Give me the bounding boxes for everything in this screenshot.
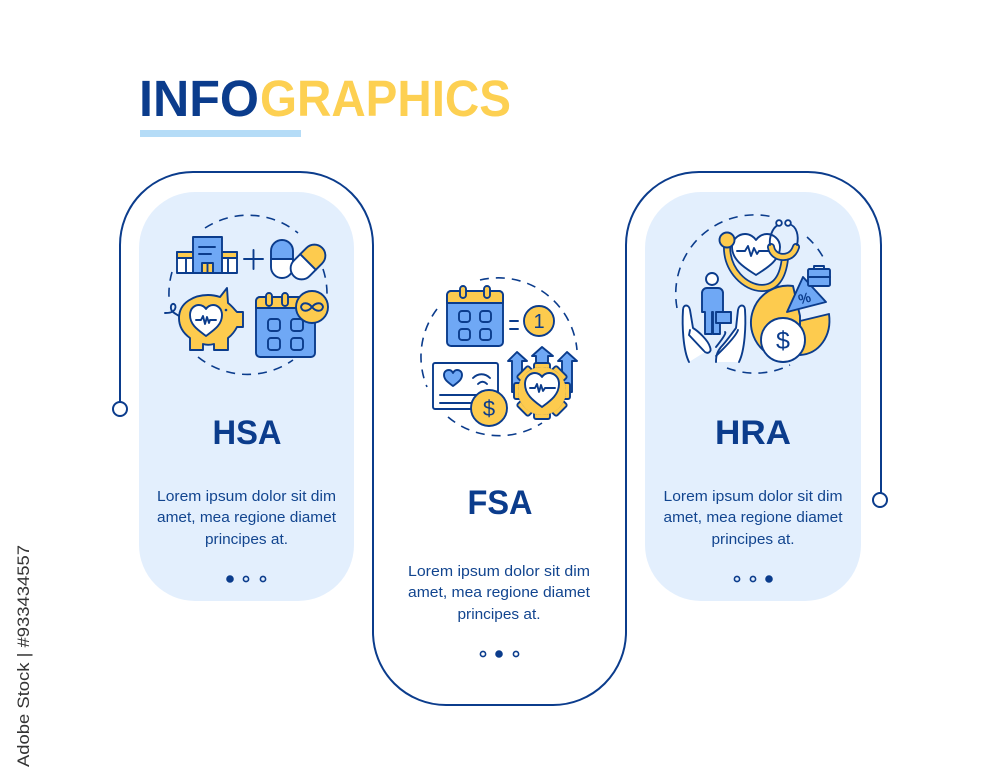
icon: pie chart with tag, briefcase and coin <box>751 266 830 362</box>
title: INFO <box>139 70 259 127</box>
icon: pie chart with tag, briefcase and coin: $ <box>776 327 790 355</box>
pagination dots: HSA <box>227 576 266 582</box>
heading: FSA: FSA <box>468 484 532 522</box>
text block: HRA description: principes at. <box>712 531 794 548</box>
icon: HRA benefits <box>676 215 830 373</box>
icon: FSA benefits <box>421 278 577 436</box>
heading: HSA: HSA <box>212 414 282 452</box>
icon: insurance card with coin: $ <box>483 396 495 421</box>
icon: calendar equals one <box>447 286 554 346</box>
icon: upright pill <box>271 240 293 278</box>
icon: heart with stethoscope <box>720 220 798 288</box>
title: GRAPHICS <box>260 70 511 127</box>
text block: FSA description: principes at. <box>458 606 540 623</box>
text block: HSA description: amet, mea regione diamet <box>157 509 337 526</box>
title <box>139 70 511 127</box>
icon: HSA savings <box>165 215 330 374</box>
panel: HRA background <box>645 192 861 601</box>
icon: insurance card with coin <box>433 363 507 426</box>
icon: calendar with infinity <box>256 291 328 357</box>
text block: FSA description: amet, mea regione diamet <box>408 584 591 601</box>
text block: HRA description <box>664 488 843 548</box>
text block: FSA description: Lorem ipsum dolor sit dim <box>408 563 590 580</box>
text block: HRA description: amet, mea regione diamet <box>664 509 843 526</box>
pagination dots: FSA <box>480 651 519 657</box>
icon: tilted pill <box>286 240 330 284</box>
text block: FSA description <box>408 563 591 623</box>
pagination dots: HRA <box>734 576 772 582</box>
icon: piggy bank <box>165 288 243 350</box>
heading: HRA: HRA <box>715 414 791 452</box>
connecting outline <box>113 172 887 705</box>
icon: gear with arrows and heart <box>508 347 577 419</box>
icon: hospital <box>177 237 237 273</box>
icon: calendar equals one: 1 <box>533 311 545 333</box>
icon: person in hands <box>683 273 745 362</box>
title underline <box>140 130 301 137</box>
icon: pie chart with tag, briefcase and coin: % <box>796 289 813 307</box>
stock credit: Adobe Stock | #933434557 <box>14 545 33 767</box>
text block: HSA description <box>157 488 337 548</box>
panel: HSA background <box>139 192 354 601</box>
icon: plus <box>244 250 263 269</box>
text block: HSA description: principes at. <box>205 531 288 548</box>
text block: HSA description: Lorem ipsum dolor sit dim <box>157 488 336 505</box>
text block: HRA description: Lorem ipsum dolor sit dim <box>664 488 842 505</box>
